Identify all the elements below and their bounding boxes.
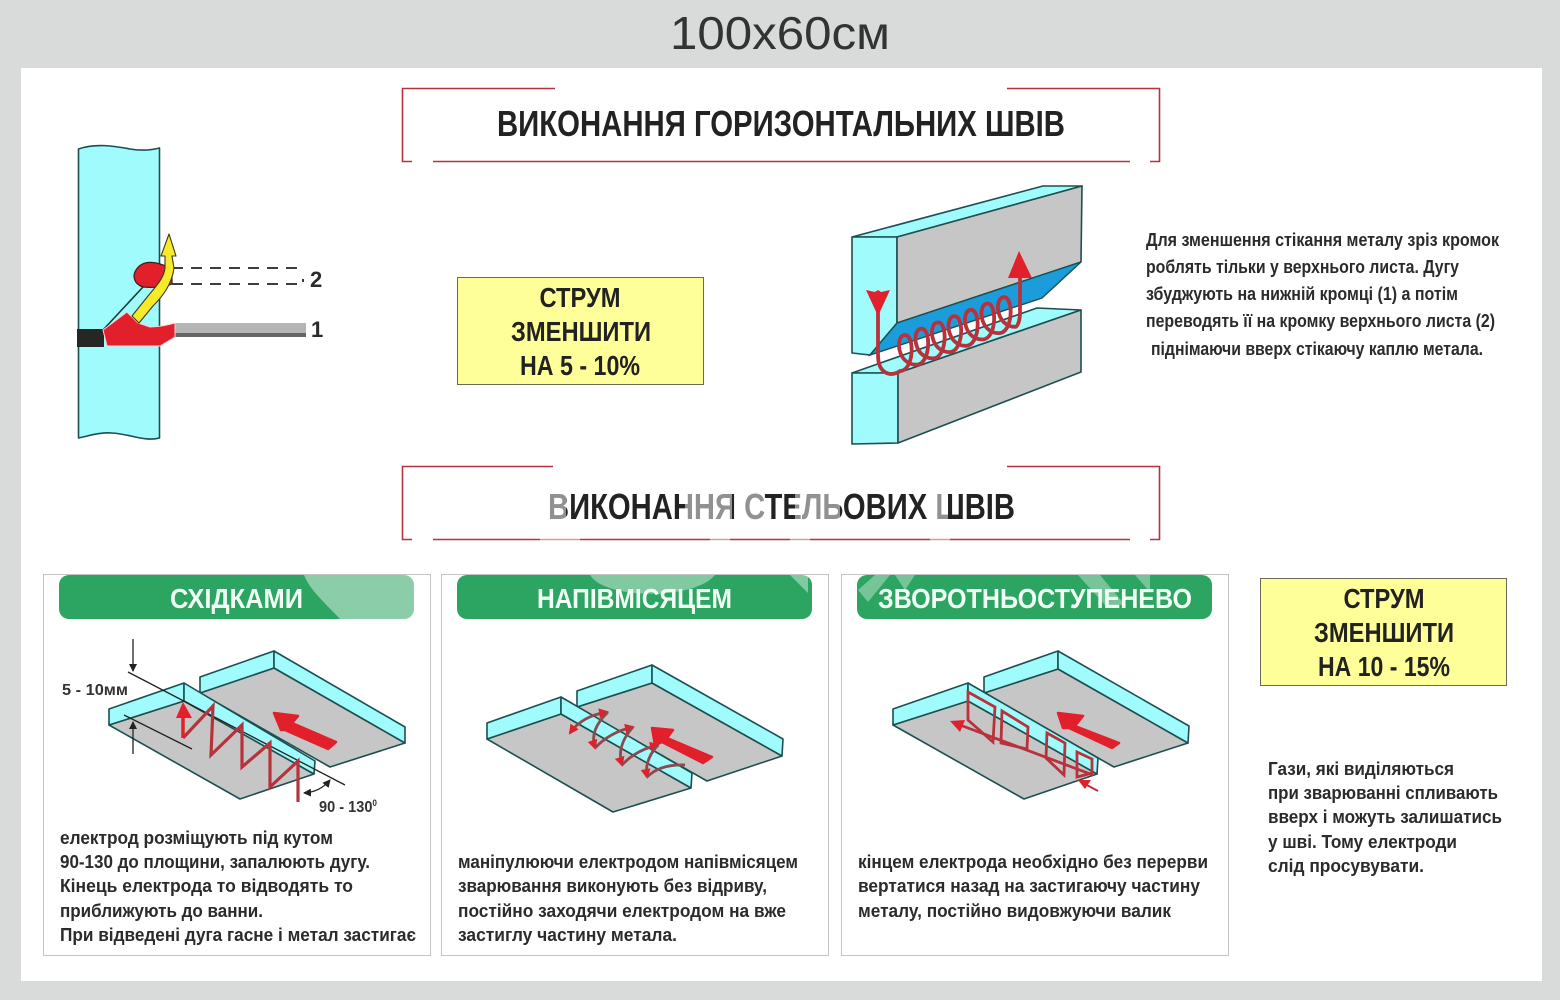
small entry arrow [1078, 780, 1098, 791]
text: reverse step [858, 852, 1208, 921]
text: reverse step: вертатися назад на застигаючу частину [858, 876, 1200, 896]
callout: current reduce 5-10%: НА 5 - 10% [520, 350, 640, 381]
text: reverse step: кінцем електрода необхідно без перерви [858, 852, 1208, 872]
panel: reverse step [842, 574, 1228, 956]
label: reverse step: ЗВОРОТНЬОСТУПЕНЕВО [878, 583, 1192, 614]
text: in steps: електрод розміщують під кутом [60, 828, 333, 848]
direction arrow [1058, 713, 1119, 748]
down arrow head [866, 290, 890, 316]
callout: current reduce 10-15%: СТРУМ [1344, 583, 1424, 614]
labels 1 and 2: 1 [311, 317, 323, 342]
direction arrow [274, 713, 336, 749]
text: in steps: 90-130 до площини, запалюють дугу. [60, 852, 370, 872]
label: half-moon [457, 575, 812, 619]
text: gases note: у шві. Тому електроди [1268, 832, 1457, 852]
text: gases note [1268, 759, 1502, 876]
heading: overhead seams: ВИКОНАННЯ СТЕЛЬОВИХ ШВІВ [548, 486, 1015, 527]
text: horizontal seam description: роблять тільки у верхнього листа. Дугу [1146, 257, 1459, 277]
dimension lines [124, 639, 345, 793]
upper plate [852, 186, 1082, 355]
molten drop [134, 262, 172, 287]
label: in steps [59, 575, 414, 619]
text: horizontal seam description: переводять її на кромку верхнього листа (2) [1146, 311, 1495, 331]
right plate [984, 651, 1189, 767]
diagram: half-moon weave [487, 665, 783, 812]
step frames [968, 692, 1092, 777]
text: horizontal seam description: збуджують на нижній кромці (1) а потім [1146, 284, 1458, 304]
text: horizontal seam description: піднімаючи вверх стікаючу каплю метала. [1151, 339, 1483, 359]
text: gases note: Гази, які виділяються [1268, 759, 1454, 779]
text: half-moon: зварювання виконують без відриву, [458, 876, 767, 896]
callout: current reduce 5-10%: СТРУМ [540, 282, 620, 313]
text: horizontal seam description: Для зменшення стікання металу зріз кромок [1146, 230, 1500, 250]
diagram: plates with horizontal seam [852, 186, 1082, 444]
weld pool [103, 312, 175, 346]
size title: 100x60см [670, 7, 890, 59]
left plate [487, 697, 692, 812]
weaving electrode path [878, 275, 1020, 374]
main return arrow [950, 720, 1093, 775]
text: in steps: Кінець електрода то відводять то [60, 876, 353, 896]
left plate [893, 683, 1098, 799]
text: gases note: при зварюванні спливають [1268, 783, 1498, 803]
angle label: 0 [372, 798, 377, 808]
right plate [577, 665, 783, 781]
text: in steps [60, 828, 416, 945]
text: in steps: приближують до ванни. [60, 901, 263, 921]
left plate [109, 683, 315, 799]
up arrow head [1008, 251, 1032, 278]
diagram: side view of horizontal seam [77, 146, 323, 439]
panel: in steps [44, 574, 430, 956]
watermark fade on heading [540, 490, 950, 542]
text: reverse step: металу, постійно видовжуючи валик [858, 901, 1172, 921]
text: gases note: слід просувувати. [1268, 856, 1424, 876]
text: horizontal seam description [1146, 230, 1500, 359]
label: in steps: СХІДКАМИ [170, 583, 303, 614]
diagram: zigzag weave [62, 639, 405, 816]
label: half-moon: НАПІВМІСЯЦЕМ [537, 583, 732, 614]
angle label: 90 - 130 [319, 799, 378, 816]
text: half-moon: постійно заходячи електродом на вже [458, 901, 786, 921]
labels 1 and 2: 2 [310, 267, 322, 292]
dashed electrode position 2 [172, 268, 303, 284]
callout: current reduce 10-15%: НА 10 - 15% [1318, 651, 1450, 682]
heading: horizontal seams [402, 88, 1160, 162]
callout: current reduce 5-10% [458, 278, 704, 384]
small up arrow [176, 702, 192, 738]
right plate [200, 651, 405, 767]
text: half-moon [458, 852, 798, 945]
direction arrow [652, 728, 712, 763]
plate [78, 146, 160, 439]
text: half-moon: застиглу частину метала. [458, 925, 677, 945]
callout: current reduce 5-10%: ЗМЕНШИТИ [511, 316, 651, 347]
panel: half-moon [442, 574, 828, 956]
text: in steps: При відведені дуга гасне і метал застигає [60, 925, 416, 945]
callout: current reduce 10-15% [1260, 578, 1506, 686]
backing block [77, 329, 104, 347]
dimension label: 5-10 mm: 5 - 10мм [62, 682, 128, 699]
diagram: reverse step weave [893, 651, 1189, 799]
zigzag [183, 706, 298, 802]
yellow arrow [132, 234, 176, 323]
label: reverse step [857, 575, 1212, 619]
text: gases note: вверх і можуть залишатись [1268, 807, 1502, 827]
callout: current reduce 10-15%: ЗМЕНШИТИ [1314, 617, 1454, 648]
labels 1 and 2 [310, 267, 323, 342]
crescent arcs [570, 712, 685, 777]
heading: overhead seams [402, 466, 1160, 542]
heading: horizontal seams: ВИКОНАННЯ ГОРИЗОНТАЛЬНИХ ШВІВ [497, 103, 1065, 144]
electrode [175, 323, 306, 337]
arc line [103, 287, 143, 330]
lower plate [852, 308, 1081, 444]
text: half-moon: маніпулюючи електродом напівмісяцем [458, 852, 798, 872]
